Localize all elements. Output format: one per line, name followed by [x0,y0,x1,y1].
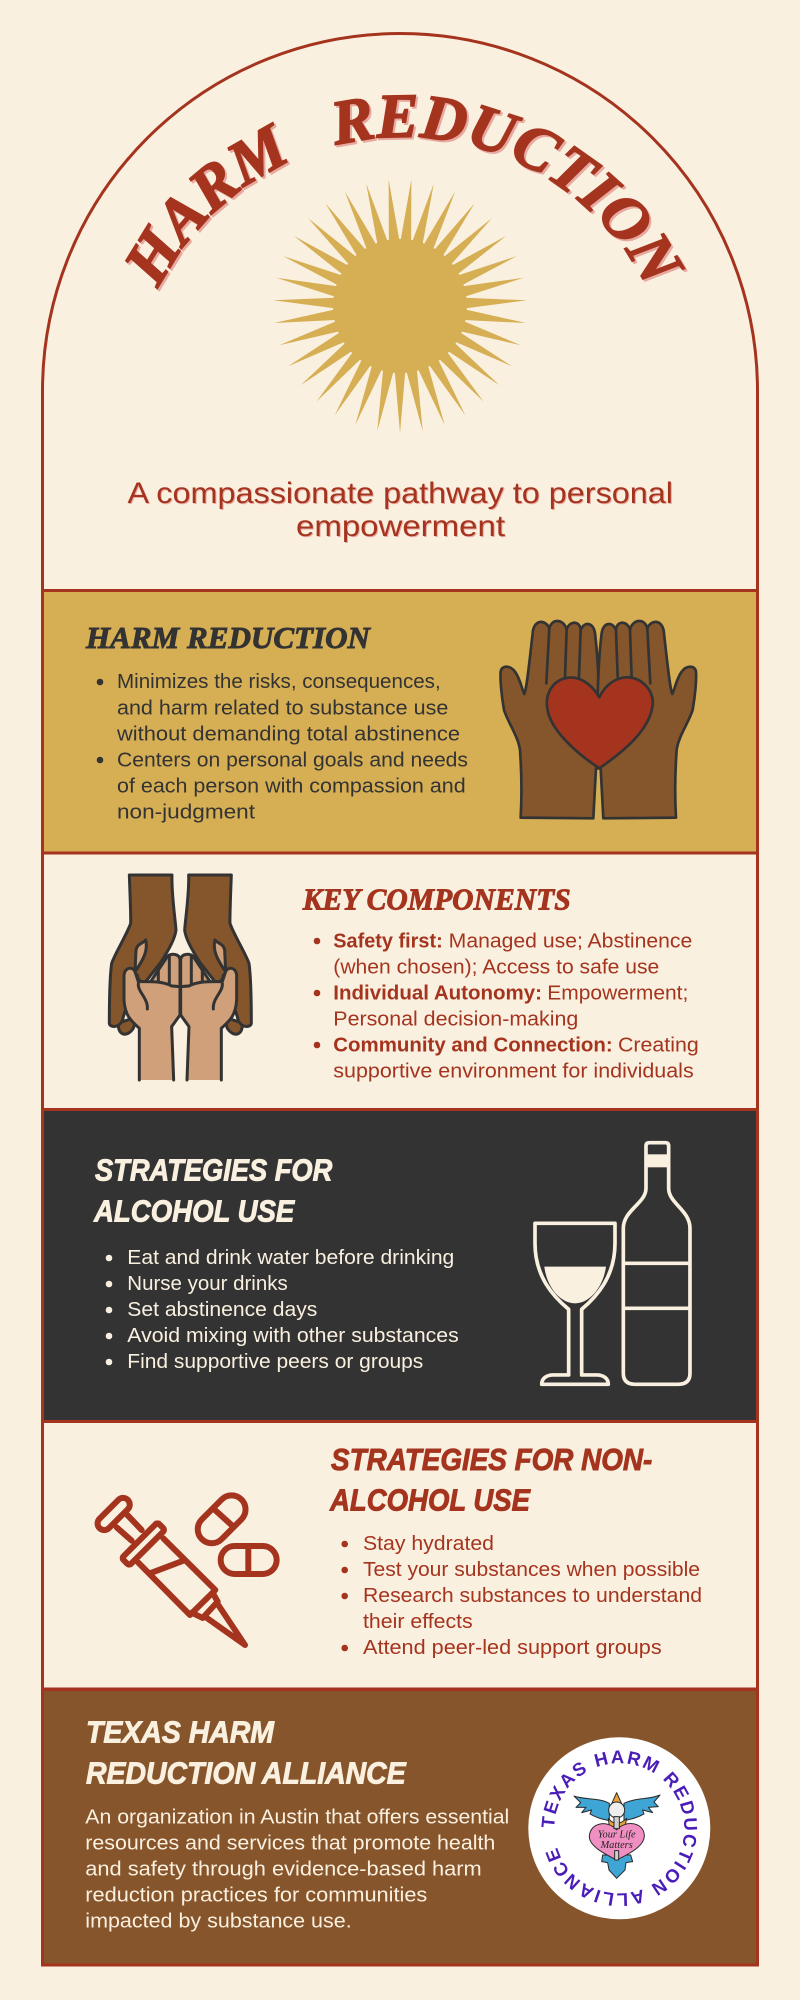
bullet list: definition: Minimizes the risks, consequences, [117,671,441,693]
bullet list: components [314,930,699,1082]
bullet list: components: supportive environment for individuals [333,1060,694,1082]
bullet list: non-alcohol strategies [341,1533,702,1659]
bullet list: alcohol strategies: Set abstinence days [127,1299,317,1321]
heading: texas harm reduction alliance [86,1714,407,1790]
heading: texas harm reduction alliance: TEXAS HARM [86,1714,275,1749]
bullet list: components: Personal decision-making [333,1008,578,1030]
logo emblem [574,1793,660,1878]
bullet list: alcohol strategies: Eat and drink water before drinking [127,1247,454,1269]
heading: key components: KEY COMPONENTS [302,881,571,916]
icon: hands over hands [109,875,251,1080]
bullet list: components: Community and Connection: [333,1034,613,1056]
heading: strategies for alcohol use [93,1153,333,1229]
heading: strategies for alcohol use: ALCOHOL USE [93,1194,295,1229]
logo emblem: Your Life [598,1829,636,1840]
bullet list: definition: non-judgment [117,801,255,823]
bullet list: alcohol strategies: Nurse your drinks [127,1273,288,1295]
logo: texas harm reduction alliance badge [528,1737,710,1920]
panel: strategies for non-alcohol use [42,1422,758,1689]
bullet list: definition: without demanding total abstinence [116,723,460,745]
heading: harm reduction: HARM REDUCTION [85,620,372,655]
alliance description: impacted by substance use. [85,1910,352,1932]
subtitle: empowerment [296,510,506,543]
bullet list: definition: and harm related to substance use [117,697,448,719]
panel: harm reduction definition [42,590,758,853]
left pair [109,875,180,1080]
bullet list: components: (when chosen); Access to safe use [333,956,659,978]
icon: sun [273,179,527,433]
bullet list: alcohol strategies: Find supportive peers or groups [127,1351,423,1373]
panel: arch header [41,32,759,589]
subtitle [128,477,673,543]
panel: strategies for alcohol use [42,1110,758,1422]
logo ring text: TEXAS HARM REDUCTION ALLIANCE [541,1750,698,1906]
alliance description [85,1806,509,1932]
subtitle: A compassionate pathway to personal [128,477,673,510]
icon: wine glass and bottle [535,1143,690,1384]
bullet list: definition: of each person with compassion and [117,775,466,797]
panel: texas harm reduction alliance [41,1690,759,1966]
logo emblem: Matters [600,1840,633,1851]
bullet list: components: Empowerment; [547,982,688,1004]
bottle [623,1143,690,1384]
bullet list: definition [97,671,468,823]
icon: syringe and pills [95,1490,277,1645]
title: Harm Reduction on arc: HARM REDUCTION [124,94,688,292]
heading: strategies for non-alcohol use: ALCOHOL USE [329,1483,531,1518]
bullet list: non-alcohol strategies: Attend peer-led support groups [363,1637,662,1659]
bullet list: components: Individual Autonomy: [333,982,542,1004]
alliance description: resources and services that promote health [85,1832,495,1854]
heading: strategies for non-alcohol use: STRATEGIES FOR NON- [331,1442,652,1477]
heading: strategies for non-alcohol use [329,1442,652,1518]
bullet list: alcohol strategies [106,1247,459,1373]
bullet list: non-alcohol strategies: Research substances to understand [363,1585,702,1607]
bullet list: components: Creating [618,1034,699,1056]
alliance description: reduction practices for communities [85,1884,427,1906]
wine [544,1267,606,1303]
wine glass [535,1223,615,1384]
alliance description: An organization in Austin that offers essential [85,1806,509,1828]
heading: texas harm reduction alliance: REDUCTION ALLIANCE [86,1755,407,1790]
bottle cap band [646,1154,669,1167]
right pair [181,875,251,1080]
syringe [95,1495,245,1645]
bullet list: components: Managed use; Abstinence [449,930,692,952]
heading: strategies for alcohol use: STRATEGIES FOR [95,1153,333,1188]
bullet list: definition: Centers on personal goals and needs [117,749,468,771]
bullet list: components: Safety first: [333,930,443,952]
bullet list: non-alcohol strategies: Stay hydrated [363,1533,494,1555]
panel: key components [42,853,758,1110]
icon: hands holding heart [501,621,696,818]
bullet list: alcohol strategies: Avoid mixing with other substances [127,1325,459,1347]
bullet list: non-alcohol strategies: their effects [363,1611,473,1633]
alliance description: and safety through evidence-based harm [85,1858,482,1880]
bullet list: non-alcohol strategies: Test your substances when possible [363,1559,700,1581]
pills [192,1490,277,1574]
